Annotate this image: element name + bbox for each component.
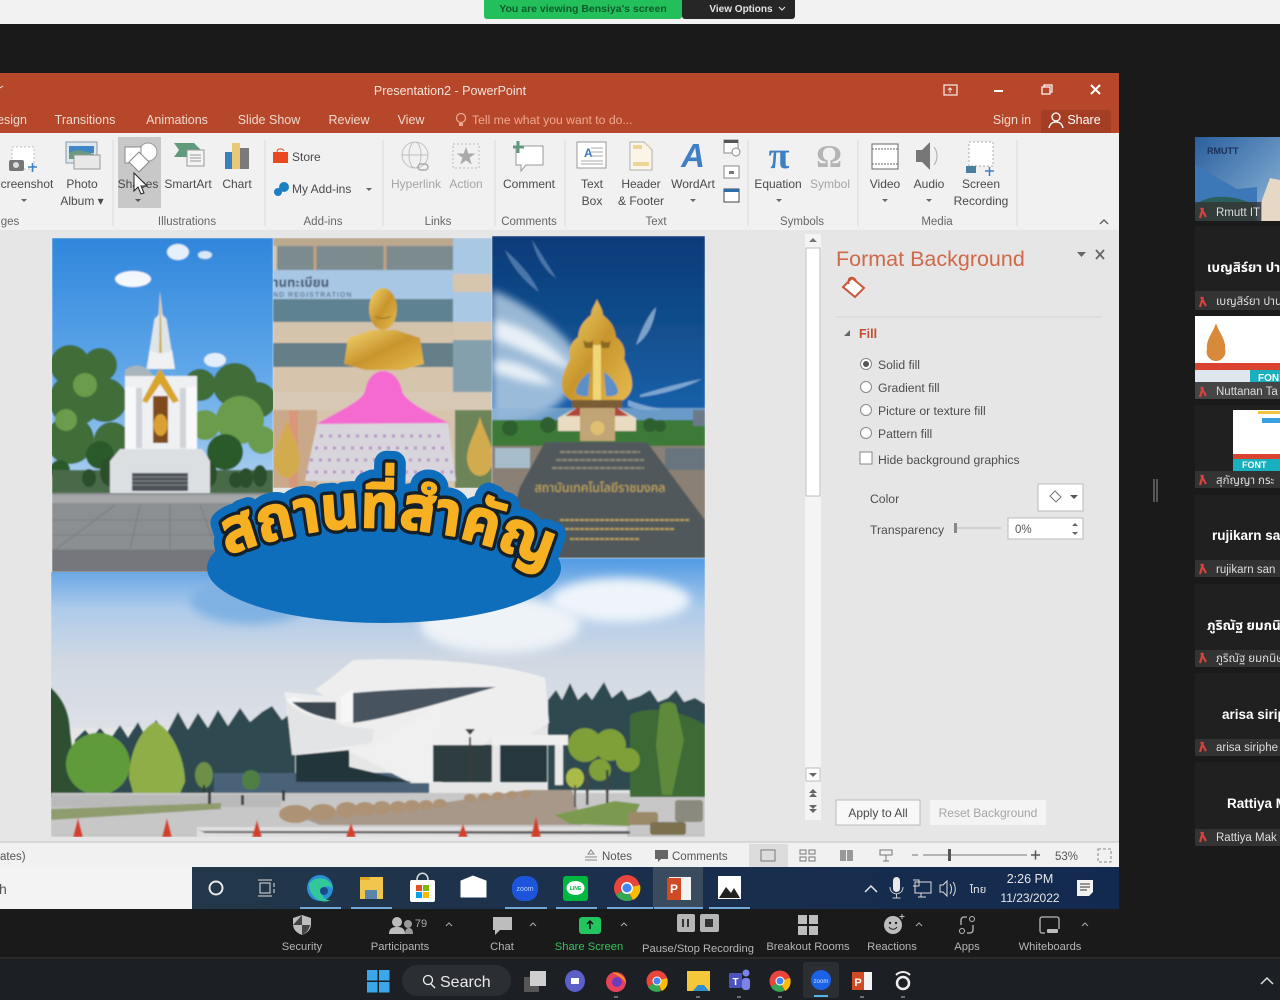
ribbon tabs xyxy=(0,110,1111,133)
participant: Rmutt IT xyxy=(1195,137,1280,221)
colour and transparency controls xyxy=(870,484,1083,539)
format background panel: Fill xyxy=(859,327,877,341)
icon: powerpoint: P xyxy=(854,977,862,989)
images group: ges xyxy=(1,216,20,228)
system tray xyxy=(865,872,1093,905)
fill options: Solid fill xyxy=(878,358,920,372)
slide photo: golden monument xyxy=(492,236,705,558)
zoom top strip with screen share banner xyxy=(0,0,1280,24)
add-ins group: Add-ins xyxy=(304,216,343,228)
participant: สุกัญญา: สุกัญญา กระ xyxy=(1216,473,1275,490)
slide vertical scrollbar xyxy=(805,234,821,820)
icon: zoom active: zoom xyxy=(814,979,828,985)
blue ellipse behind the title xyxy=(207,513,561,623)
colour and transparency controls: Color xyxy=(870,492,899,506)
participant: Rmutt IT: Rmutt IT xyxy=(1216,207,1260,219)
symbols group: Ω xyxy=(816,138,842,174)
ribbon tabs: Sign in xyxy=(993,113,1031,127)
ribbon tabs: Tell me what you want to do... xyxy=(472,113,633,127)
panel buttons: Reset Background xyxy=(939,806,1037,820)
media group xyxy=(870,142,1108,228)
comments group: Comment xyxy=(503,177,556,191)
media group: Media xyxy=(921,216,953,228)
panel buttons xyxy=(836,800,1046,825)
participant: rujikarn xyxy=(1195,530,1280,577)
text group xyxy=(577,137,740,228)
fill options: Pattern fill xyxy=(878,427,932,441)
whiteboards: Whiteboards xyxy=(1019,941,1082,953)
text group: Header xyxy=(621,177,661,191)
images group: Album ▾ xyxy=(60,194,104,208)
symbols group: π xyxy=(769,135,790,177)
media group: Screen xyxy=(962,177,1000,191)
chat: Chat xyxy=(490,941,515,953)
participant: สุกัญญา xyxy=(1195,405,1280,490)
text group: A xyxy=(680,137,705,174)
icon: chrome xyxy=(770,970,791,992)
icon: teams: T xyxy=(732,977,739,988)
links group xyxy=(391,142,483,228)
illustrations group: Chart xyxy=(222,177,252,191)
format background panel xyxy=(836,247,1104,825)
powerpoint status bar: Comments xyxy=(672,851,728,863)
comments group xyxy=(501,141,557,228)
icon: windows start xyxy=(367,970,390,992)
icon: line: LINE xyxy=(570,886,582,892)
add-ins group: My Add-ins xyxy=(292,182,351,196)
participant: arisa: arisa siriphe xyxy=(1216,742,1278,754)
add-ins group: Store xyxy=(292,150,321,164)
icon: powerpoint active: P xyxy=(670,882,678,896)
powerpoint title bar: Presentation2 - PowerPoint xyxy=(374,84,527,98)
panel buttons: Apply to All xyxy=(848,806,908,820)
icon: zoom active xyxy=(803,962,839,998)
apps: Apps xyxy=(954,941,980,953)
reactions xyxy=(867,914,922,953)
slide title: สถานที่สำคัญ: สถานที่สำคัญ xyxy=(218,459,558,578)
zoom meeting toolbar xyxy=(0,909,1280,958)
recording: Pause/Stop Recording xyxy=(642,943,754,955)
format background panel: Format Background xyxy=(836,247,1025,271)
system tray: ไทย xyxy=(969,881,986,898)
apps xyxy=(954,916,980,953)
icon: edge xyxy=(307,875,333,902)
icon: ring app xyxy=(896,972,910,989)
bottom local windows taskbar xyxy=(0,959,1280,1000)
panel resize handle xyxy=(1154,479,1157,502)
slide photo: modern white building xyxy=(50,558,705,837)
links group: ★ xyxy=(456,146,476,168)
zoom top strip with screen share banner: You are viewing Bensiya's screen xyxy=(499,3,667,15)
participant: สุกัญญา: FONT xyxy=(1242,460,1267,470)
icon: zoom xyxy=(512,876,538,901)
slide photo: golden bust xyxy=(273,238,493,488)
participants: 79 xyxy=(415,918,427,930)
participant: Rattiya xyxy=(1195,798,1280,846)
icon: zoom: zoom xyxy=(516,886,534,893)
participants: Participants xyxy=(371,941,430,953)
media group: Video xyxy=(870,177,901,191)
fill options: Hide background graphics xyxy=(878,453,1020,467)
text group: Box xyxy=(582,194,602,208)
icon: chrome xyxy=(646,970,668,992)
ribbon tabs: Transitions xyxy=(55,113,115,127)
text group: Text xyxy=(581,177,604,191)
powerpoint status bar xyxy=(0,842,1119,867)
system tray: 11/23/2022 xyxy=(1000,891,1060,905)
participant gallery xyxy=(1195,137,1280,846)
ribbon xyxy=(0,133,1119,230)
icon: chrome xyxy=(614,875,640,901)
shared windows taskbar xyxy=(0,867,1119,909)
ribbon tabs: Review xyxy=(328,113,370,127)
add-ins group xyxy=(273,149,372,228)
icon: meet xyxy=(565,970,585,992)
ribbon tabs: Share xyxy=(1067,113,1101,127)
fill options: Gradient fill xyxy=(878,381,940,395)
security: Security xyxy=(282,941,323,953)
participant: Rattiya: Rattiya Mak xyxy=(1216,832,1277,844)
participant: เบญสิร์ยา xyxy=(1195,262,1280,310)
chat xyxy=(490,917,536,953)
text group: WordArt xyxy=(671,177,716,191)
slide photo: golden bust: านทะเบียน xyxy=(273,275,329,290)
icon: fill bucket xyxy=(843,278,864,297)
icon: photos xyxy=(718,876,741,899)
workspace background xyxy=(0,230,1119,842)
icon: teams xyxy=(729,970,750,990)
participant: rujikarn: rujikarn sa xyxy=(1212,528,1280,543)
illustrations group: Shapes xyxy=(118,177,158,191)
participant: rujikarn: rujikarn san xyxy=(1216,564,1275,576)
icon: explorer xyxy=(687,971,710,991)
text group: Text xyxy=(645,216,667,228)
illustrations group: SmartArt xyxy=(164,177,212,191)
system tray: 2:26 PM xyxy=(1007,872,1053,886)
powerpoint status bar: 53% xyxy=(1055,851,1078,863)
reactions: Reactions xyxy=(867,941,917,953)
text group: A xyxy=(584,146,593,160)
links group: Links xyxy=(425,216,452,228)
share screen xyxy=(555,917,627,953)
symbols group: Symbols xyxy=(780,216,824,228)
icon: store xyxy=(410,873,435,902)
slide title: สถานที่สำคัญ: สถานที่สำคัญ xyxy=(222,462,555,574)
breakout rooms xyxy=(766,915,850,953)
slide photo: white shrine xyxy=(46,238,276,572)
symbols group xyxy=(754,135,850,228)
share screen: Share Screen xyxy=(555,941,623,953)
slide photo: golden bust: ND REGISTRATION xyxy=(273,292,352,299)
icon: file explorer xyxy=(360,877,383,899)
links group: Action xyxy=(449,177,483,191)
search pill xyxy=(402,965,511,996)
symbols group: Symbol xyxy=(810,177,850,191)
mouse cursor xyxy=(134,173,147,194)
images group xyxy=(1,142,104,228)
security xyxy=(282,915,323,953)
ribbon tabs: Slide Show xyxy=(238,113,301,127)
participant: arisa xyxy=(1195,709,1280,756)
powerpoint status bar: ates) xyxy=(0,851,26,863)
symbols group: Equation xyxy=(754,177,802,191)
participant: Nuttanan: Nuttanan Ta xyxy=(1216,386,1278,398)
participants xyxy=(371,917,452,953)
ribbon tabs: Animations xyxy=(146,113,208,127)
links group: Hyperlink xyxy=(391,177,442,191)
breakout rooms: Breakout Rooms xyxy=(766,941,850,953)
recording xyxy=(642,914,754,955)
icon: line xyxy=(563,876,588,901)
icon: firefox xyxy=(606,972,626,992)
whiteboards xyxy=(1019,917,1088,953)
powerpoint title bar xyxy=(0,73,1119,133)
zoom top strip with screen share banner: View Options xyxy=(709,4,773,15)
search pill: Search xyxy=(440,974,491,991)
participant: Nuttanan: FON xyxy=(1258,373,1279,384)
icon: task view xyxy=(524,971,546,992)
slide title: สถานที่สำคัญ: สถานที่สำคัญ xyxy=(210,450,566,559)
slide photo: golden monument: สถาบันเทคโนโลยีราชมงคล xyxy=(535,479,665,498)
illustrations group: Illustrations xyxy=(158,216,216,228)
participant: ภูริณัฐ xyxy=(1195,619,1280,667)
fill options: Picture or texture fill xyxy=(878,404,986,418)
images group: creenshot xyxy=(1,177,54,191)
colour and transparency controls: Transparency xyxy=(870,523,945,537)
icon: powerpoint active xyxy=(653,867,703,908)
illustrations group xyxy=(118,137,252,228)
colour and transparency controls: 0% xyxy=(1015,524,1032,536)
images group: Photo xyxy=(66,177,98,191)
comments group: Comments xyxy=(501,216,557,228)
icon: powerpoint xyxy=(852,972,872,990)
icon: mail xyxy=(461,876,486,897)
media group: Recording xyxy=(954,194,1008,208)
ribbon tabs: View xyxy=(398,113,425,127)
fill options xyxy=(860,358,1020,467)
text group: & Footer xyxy=(618,194,664,208)
media group: Audio xyxy=(914,177,945,191)
participant: Rmutt IT: RMUTT xyxy=(1207,146,1239,156)
participant: Nuttanan xyxy=(1195,316,1280,399)
powerpoint status bar: Notes xyxy=(602,851,632,863)
